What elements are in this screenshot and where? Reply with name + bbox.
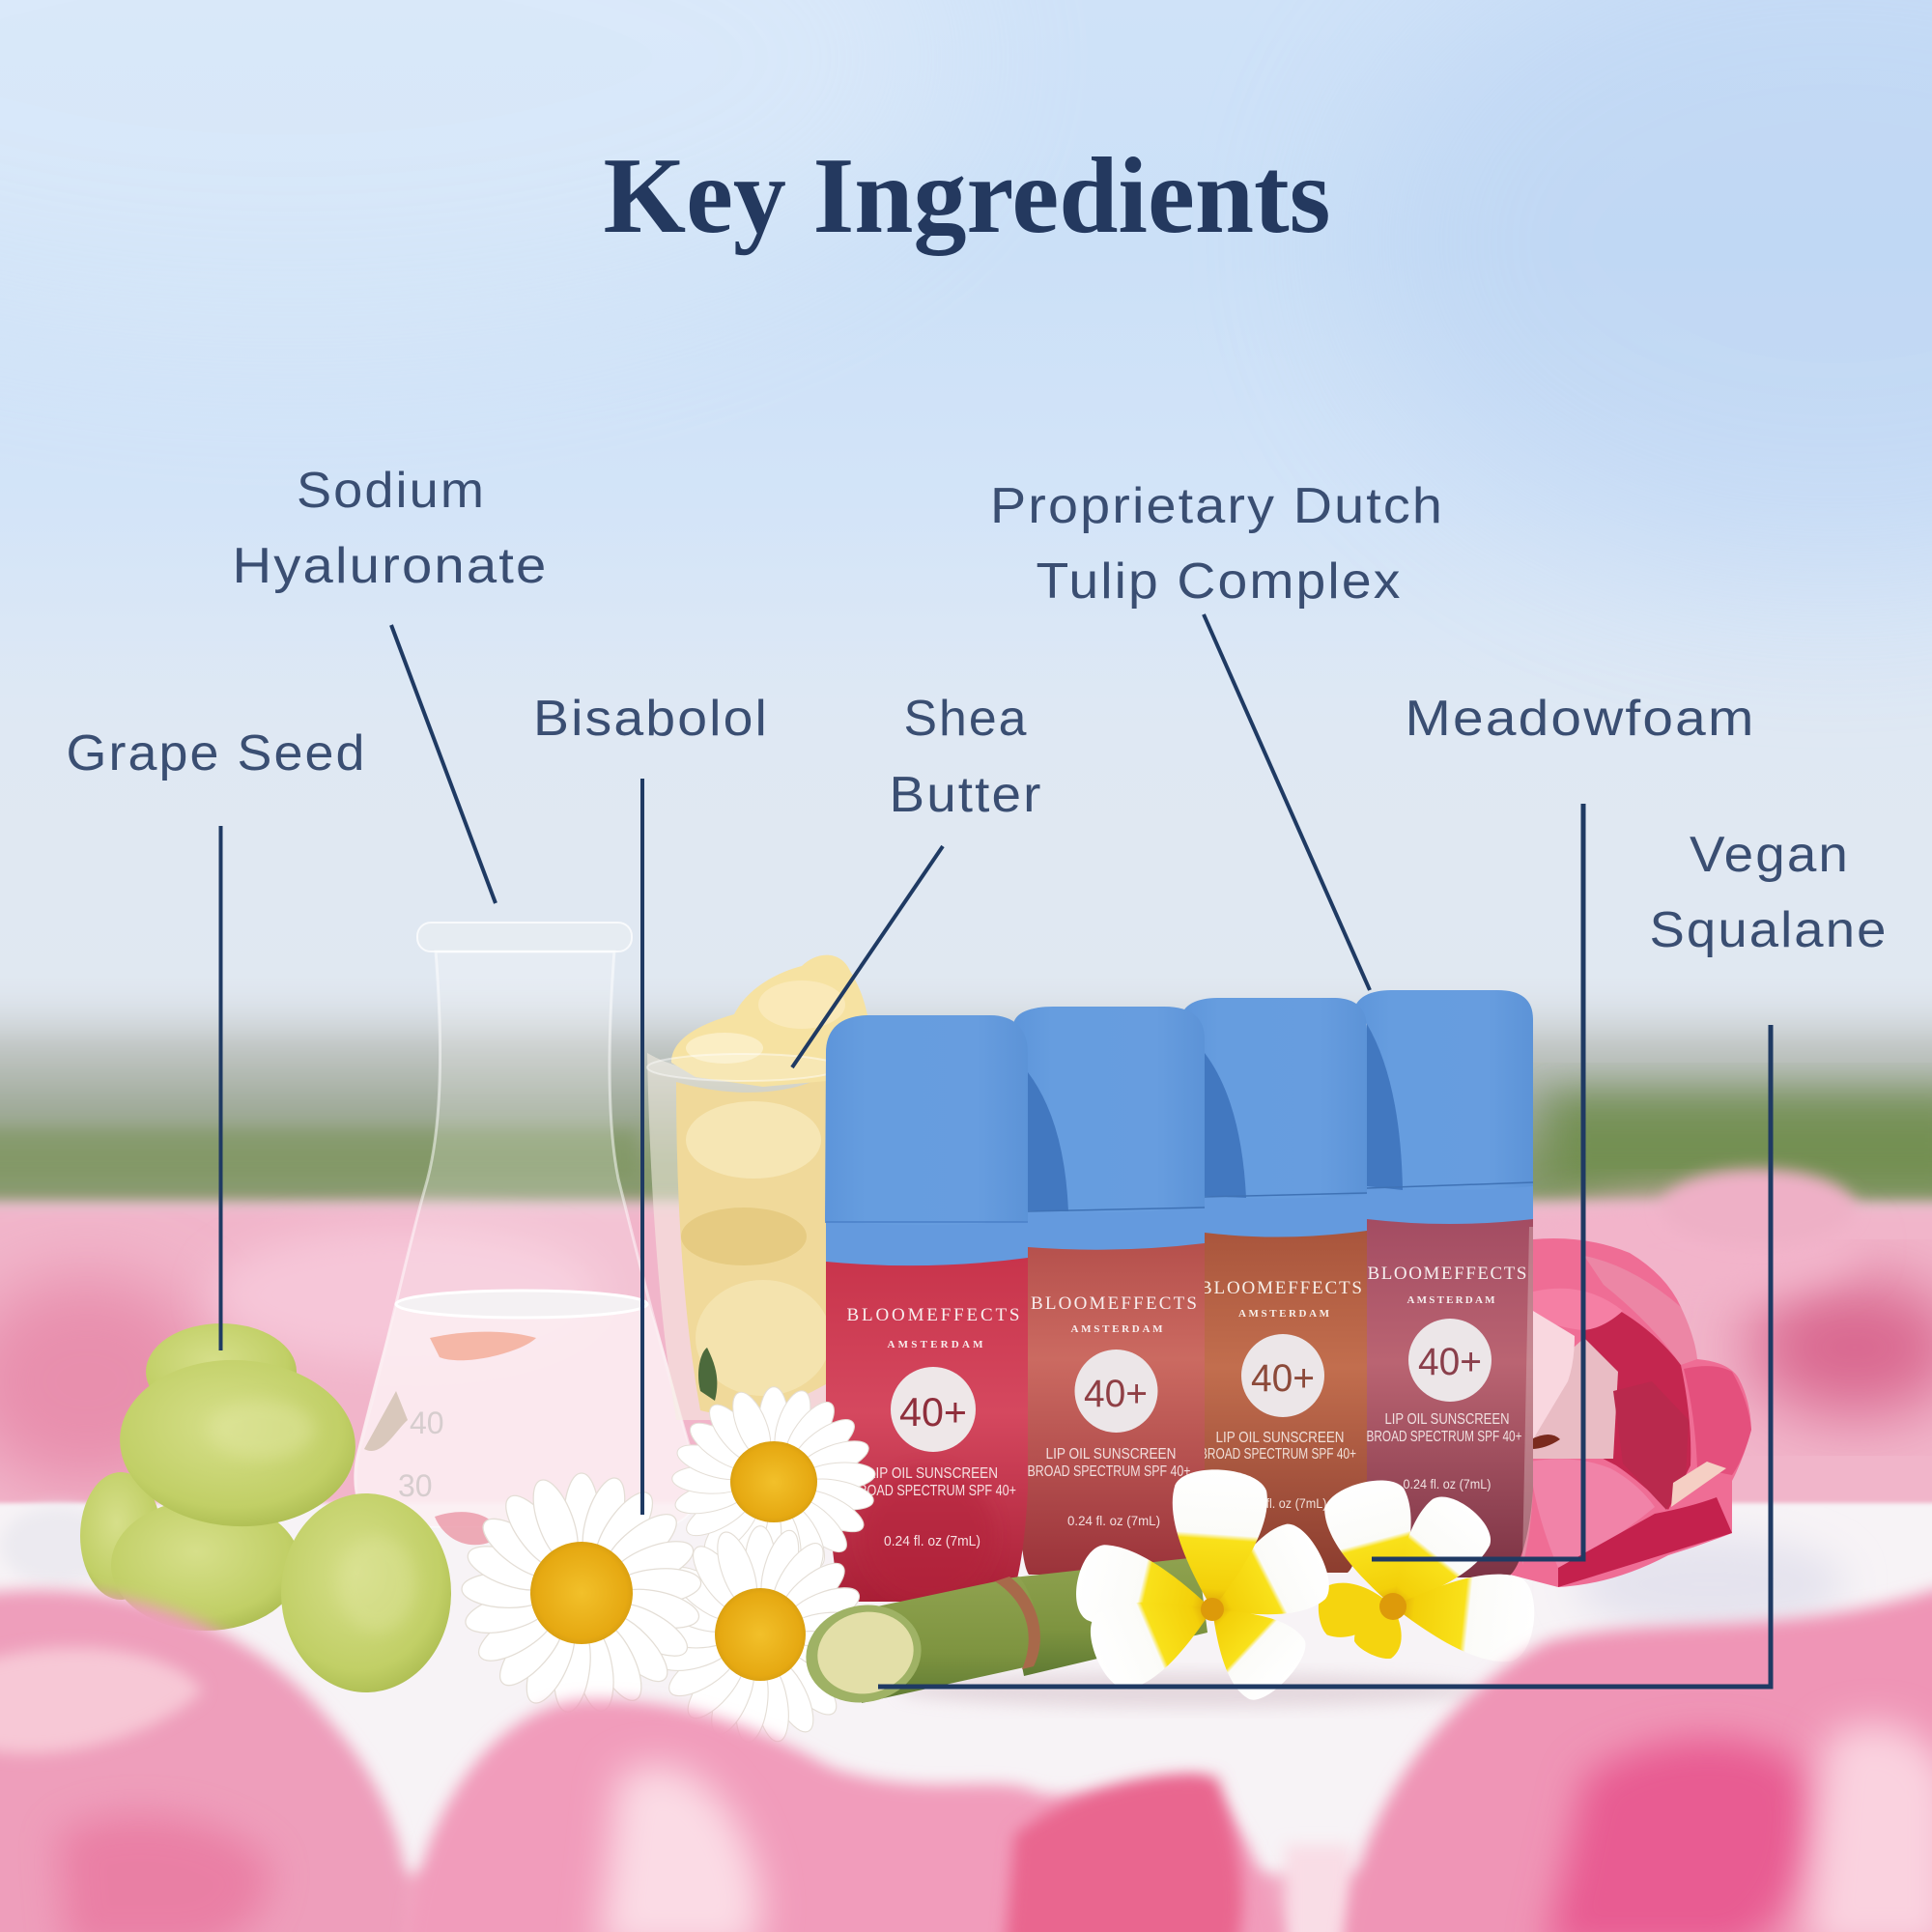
product: lip oil sunscreen bottles	[825, 990, 1533, 1604]
bottle 4: BLOOMEFFECTS	[1368, 1264, 1526, 1284]
bottle 3	[1181, 998, 1367, 1573]
bottle 3: AMSTERDAM	[1238, 1308, 1330, 1320]
bottle 1: BLOOMEFFECTS	[846, 1305, 1020, 1325]
callout: shea butter: Shea	[904, 691, 1028, 747]
tulip: proprietary dutch tulip complex	[1510, 1238, 1751, 1587]
bottle 4: LIP OIL SUNSCREEN	[1385, 1411, 1509, 1428]
sugarcane: vegan squalane	[797, 1557, 1208, 1713]
background: blurred pink peonies	[0, 1169, 1932, 1521]
meadowfoam flowers	[1069, 1466, 1539, 1710]
callout: meadowfoam: Meadowfoam	[1405, 691, 1756, 747]
flower right	[1317, 1472, 1539, 1664]
callout: sodium hyaluronate: Sodium	[297, 463, 486, 519]
jar of shea butter	[647, 955, 870, 1420]
bottle 1	[825, 1015, 1028, 1604]
bottle 2: 40+	[1084, 1373, 1148, 1415]
bottle 4: AMSTERDAM	[1406, 1294, 1495, 1306]
background: white table	[0, 1503, 1932, 1932]
bottle 2: 0.24 fl. oz (7mL)	[1067, 1513, 1160, 1528]
bottle 1: 40+	[899, 1389, 967, 1435]
bottle 4: 40+	[1418, 1341, 1482, 1383]
callout: sodium hyaluronate: Hyaluronate	[232, 538, 549, 594]
bottle 4	[1354, 990, 1533, 1577]
background: sky	[0, 0, 1932, 1256]
bottle 1: AMSTERDAM	[887, 1339, 983, 1350]
table shadows	[898, 1673, 1478, 1708]
bottle 1: LIP OIL SUNSCREEN	[868, 1465, 998, 1482]
callout: bisabolol: Bisabolol	[533, 691, 769, 747]
bottle 2: LIP OIL SUNSCREEN	[1045, 1446, 1177, 1463]
bottle 1: BROAD SPECTRUM SPF 40+	[850, 1483, 1016, 1499]
title: Key Ingredients	[603, 136, 1331, 256]
callout: vegan squalane	[878, 827, 1888, 1687]
callout: vegan squalane: Squalane	[1650, 902, 1888, 958]
callout: sodium hyaluronate	[232, 463, 549, 903]
bottle 3: 0.24 fl. oz (7mL)	[1238, 1495, 1327, 1511]
flask scale: 30: 30	[398, 1468, 433, 1503]
callout: proprietary dutch tulip complex: Proprietary Dutch	[990, 478, 1444, 534]
callout: proprietary dutch tulip complex: Tulip Complex	[1036, 554, 1403, 610]
bottle 4: BROAD SPECTRUM SPF 40+	[1366, 1429, 1522, 1445]
flask: sodium hyaluronate	[354, 923, 697, 1545]
background: hazy green field	[0, 976, 1932, 1208]
bottle 4: 0.24 fl. oz (7mL)	[1403, 1476, 1492, 1492]
callout: grape seed: Grape Seed	[66, 725, 366, 781]
bottle 3: BROAD SPECTRUM SPF 40+	[1200, 1446, 1356, 1463]
callout: vegan squalane: Vegan	[1690, 827, 1850, 883]
daisies: bisabolol	[461, 1387, 876, 1744]
bottle 1: 0.24 fl. oz (7mL)	[884, 1533, 980, 1549]
bottle 2: BLOOMEFFECTS	[1031, 1293, 1197, 1314]
bottle 3: 40+	[1251, 1357, 1315, 1400]
callout: shea butter	[792, 691, 1043, 1067]
flower left	[1069, 1466, 1340, 1710]
foreground: blurred pink petals	[0, 1584, 1932, 1932]
callout: shea butter: Butter	[889, 767, 1043, 823]
grapes	[80, 1323, 451, 1692]
bottle 2: BROAD SPECTRUM SPF 40+	[1028, 1463, 1190, 1480]
callout: proprietary dutch tulip complex	[990, 478, 1444, 990]
bottle 3: LIP OIL SUNSCREEN	[1215, 1430, 1345, 1446]
bottle 3: BLOOMEFFECTS	[1200, 1278, 1362, 1298]
flask scale: 40: 40	[410, 1406, 444, 1440]
bottle 2: AMSTERDAM	[1070, 1323, 1163, 1335]
callout: meadowfoam	[1372, 691, 1756, 1559]
bottle 2	[1013, 1007, 1205, 1575]
